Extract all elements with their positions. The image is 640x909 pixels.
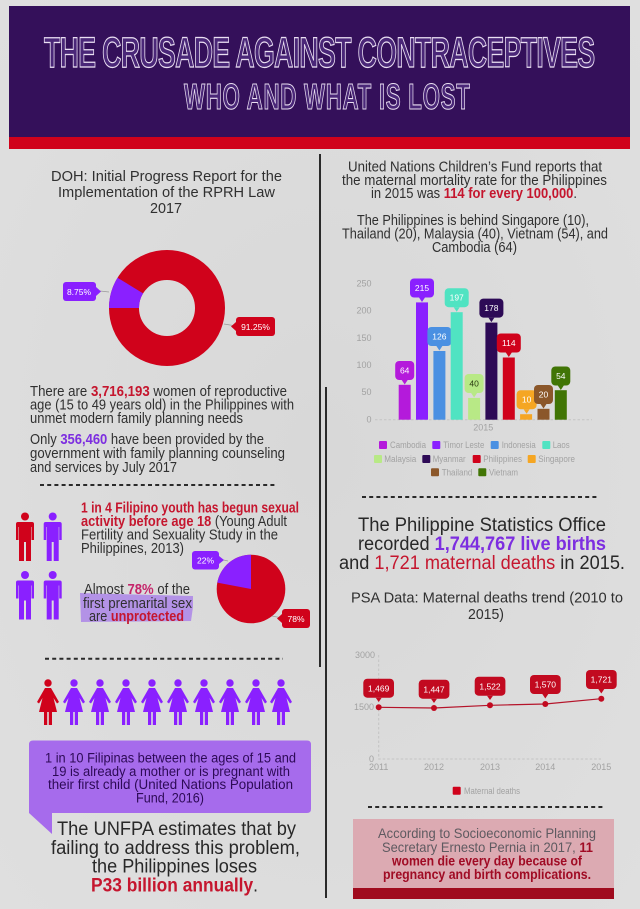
bar: Malaysia: 40 [469, 378, 479, 388]
text: provided services [30, 432, 285, 476]
heading: DOH report: DOH: Initial Progress Report for the [51, 168, 282, 185]
line chart: maternal deaths trend: 2012 [424, 762, 444, 772]
text: Philippines behind neighbours: The Philippines is behind Singapore (10), [357, 213, 589, 229]
text: unmet needs: There are 3,716,193 women of reproductive [30, 384, 287, 400]
line chart: maternal deaths trend: 2014 [535, 762, 555, 772]
label: 78%: 78% [287, 614, 305, 624]
panel: Pernia quote: According to Socioeconomic Planning [378, 825, 596, 841]
label: 8.75%: 8.75% [67, 287, 91, 297]
point: 2012 [419, 680, 449, 711]
text: PSA births and deaths: recorded 1,744,767 live births [358, 534, 606, 555]
heading: DOH report [51, 168, 282, 217]
legend: countries [374, 440, 575, 478]
bar chart: maternal mortality by country: 0 [366, 415, 372, 425]
bar chart: maternal mortality by country [356, 278, 592, 478]
heading: PSA data trend: 2015) [468, 606, 504, 623]
bar chart: maternal mortality by country: 2015 [473, 423, 493, 433]
bar: Philippines: 114 [502, 338, 516, 348]
bar chart: maternal mortality by country: 250 [356, 278, 372, 288]
bar: Singapore [517, 390, 537, 420]
legend: countries: Singapore [538, 454, 575, 464]
line chart: maternal deaths trend: 3000 [355, 650, 375, 660]
text: UNFPA estimate: P33 billion annually. [91, 876, 258, 896]
text: unmet needs [30, 384, 294, 427]
text: provided services: and services by July 2017 [30, 460, 177, 476]
bar: Timor Leste: 215 [415, 283, 429, 293]
text: UNICEF mortality rate: the maternal mortality rate for the Philippines [342, 173, 607, 189]
legend: countries: Vietnam [489, 468, 518, 478]
line chart: maternal deaths trend: 0 [369, 754, 374, 764]
text: 1 in 4 youth: activity before age 18 (Young Adult [81, 514, 287, 530]
bar: Myanmar [479, 299, 503, 420]
panel: Pernia quote: Secretary Ernesto Pernia in 2017, 11 [382, 839, 593, 855]
legend: countries: Indonesia [502, 440, 536, 450]
point: 2015: 1,721 [591, 675, 612, 685]
legend: countries: Malaysia [384, 454, 416, 464]
legend: countries: Timor Leste [443, 440, 484, 450]
legend: countries: Thailand [442, 468, 472, 478]
point: 2013: 1,522 [479, 681, 501, 691]
text: UNICEF mortality rate: United Nations Children’s Fund reports that [348, 160, 602, 176]
text: Philippines behind neighbours: Cambodia (64) [432, 240, 517, 256]
callout: 78% unprotected [80, 582, 193, 625]
panel: Pernia quote: women die every day because of [391, 852, 582, 868]
text: UNFPA estimate: the Philippines loses [92, 856, 257, 878]
heading: DOH report: Implementation of the RPRH Law [58, 184, 275, 201]
text: 1 in 4 youth: 1 in 4 Filipino youth has begun sexual [81, 500, 299, 516]
bar chart: maternal mortality by country: 200 [356, 306, 372, 316]
speech bubble: 1 in 10 Filipinas [29, 740, 311, 834]
heading: DOH report: 2017 [150, 200, 182, 217]
bar: Indonesia: 126 [432, 332, 447, 342]
text: UNICEF mortality rate: in 2015 was 114 for every 100,000. [371, 186, 577, 202]
subtitle: WHO AND WHAT IS LOST [184, 78, 470, 117]
bar chart: maternal mortality by country: 150 [356, 333, 372, 343]
text: provided services: Only 356,460 have been provided by the [30, 432, 264, 448]
text: 1 in 4 youth: Philippines, 2013) [81, 541, 184, 557]
text: PSA births and deaths: The Philippine Statistics Office [358, 515, 606, 536]
bar: Indonesia [427, 327, 451, 420]
bar: Singapore: 10 [522, 395, 532, 405]
bar: Thailand: 20 [539, 390, 548, 400]
bar: Thailand [534, 385, 553, 420]
callout: 78% unprotected: first premarital sex [83, 596, 193, 612]
text: UNFPA estimate: The UNFPA estimates that by [57, 819, 296, 840]
bar: Laos: 197 [450, 293, 464, 303]
text: PSA births and deaths [339, 515, 625, 574]
bar: Malaysia [465, 374, 484, 420]
point: 2011 [363, 679, 394, 710]
line chart: maternal deaths trend: 2011 [369, 762, 388, 772]
text: unmet needs: age (15 to 49 years old) in the Philippines with [30, 398, 294, 414]
pie chart [192, 551, 310, 628]
point: 2013 [475, 677, 505, 708]
point: 2014 [530, 675, 561, 707]
donut chart [63, 265, 275, 351]
title: THE CRUSADE AGAINST CONTRACEPTIVES [44, 29, 595, 77]
label: 91.25%: 91.25% [241, 322, 270, 332]
text: unmet needs: unmet modern family planning needs [30, 411, 243, 427]
icons: four people [16, 512, 62, 620]
point: 2012: 1,447 [423, 684, 445, 694]
text: PSA births and deaths: and 1,721 maternal deaths in 2015. [339, 553, 625, 574]
line chart: maternal deaths trend: 1500 [354, 702, 374, 712]
panel: Pernia quote [353, 819, 614, 899]
bar: Laos [445, 288, 469, 420]
label: 22%: 22% [197, 556, 214, 566]
line chart: maternal deaths trend [354, 650, 617, 796]
label: 91.25% [231, 317, 275, 336]
speech bubble: 1 in 10 Filipinas: Fund, 2016) [136, 790, 204, 806]
panel: Pernia quote: pregnancy and birth complications. [383, 866, 591, 882]
point: 2015 [586, 670, 617, 702]
bar: Cambodia: 64 [400, 366, 410, 376]
line chart: maternal deaths trend: 2013 [480, 762, 500, 772]
legend: countries: Myanmar [433, 454, 466, 464]
label: 8.75% [63, 282, 101, 301]
speech bubble: 1 in 10 Filipinas: their first child (United Nations Population [48, 777, 293, 792]
text: UNFPA estimate: failing to address this problem, [51, 838, 300, 859]
bar: Cambodia [395, 361, 414, 420]
bar: Myanmar: 178 [484, 303, 499, 313]
point: 2014: 1,570 [535, 680, 556, 690]
bar chart: maternal mortality by country: 50 [361, 387, 372, 397]
line chart: maternal deaths trend: 2015 [591, 762, 611, 772]
bar chart: maternal mortality by country: 100 [356, 360, 372, 370]
text: 1 in 4 youth: Fertility and Sexuality Study in the [81, 528, 278, 544]
text: Philippines behind neighbours [342, 213, 608, 256]
speech bubble: 1 in 10 Filipinas: 1 in 10 Filipinas between the ages of 15 and [45, 750, 296, 766]
legend: countries: Laos [553, 440, 570, 450]
bar: Vietnam: 54 [556, 371, 566, 381]
heading: PSA data trend [351, 590, 623, 623]
bar: Timor Leste [410, 278, 434, 420]
text: provided services: government with family planning counseling [30, 446, 285, 462]
bar: Philippines [497, 334, 521, 420]
heading: PSA data trend: PSA Data: Maternal deaths trend (2010 to [351, 590, 623, 607]
callout: 78% unprotected: are unprotected [89, 609, 184, 625]
legend: countries: Cambodia [390, 440, 426, 450]
icons: ten women [37, 679, 292, 725]
speech bubble: 1 in 10 Filipinas: 19 is already a mother or is pregnant with [52, 764, 290, 779]
header banner [9, 6, 630, 149]
point: 2011: 1,469 [368, 683, 390, 693]
text: Philippines behind neighbours: Thailand (20), Malaysia (40), Vietnam (54), and [342, 226, 608, 242]
legend: countries: Philippines [483, 454, 522, 464]
callout: 78% unprotected: Almost 78% of the [84, 582, 190, 598]
text: UNFPA estimate [51, 819, 300, 896]
legend: maternal deaths: Maternal deaths [464, 786, 520, 796]
text: 1 in 4 youth [81, 500, 299, 557]
bar: Vietnam [551, 366, 570, 420]
text: UNICEF mortality rate [342, 160, 607, 202]
